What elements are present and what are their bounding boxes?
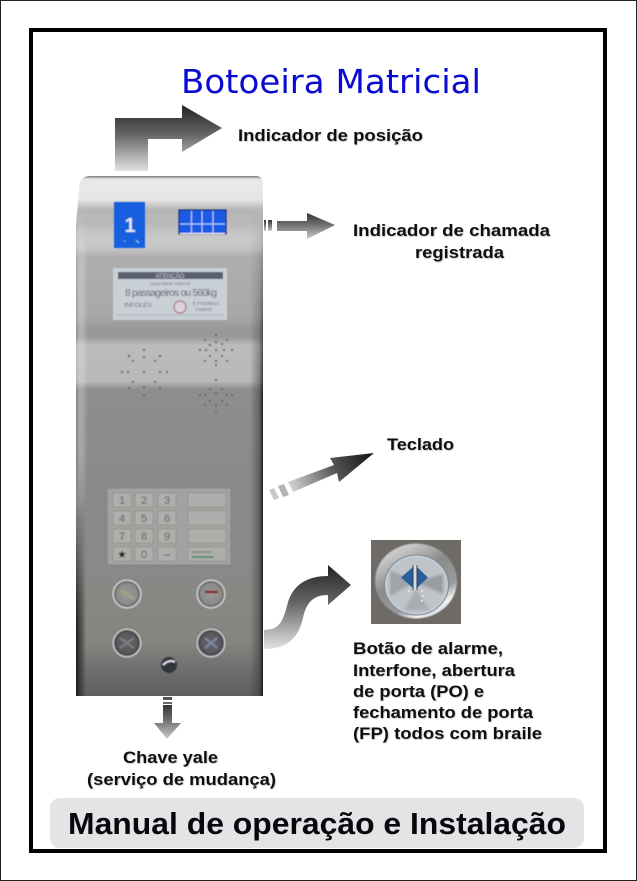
keypad: 4 [119, 513, 125, 525]
position display: 1 [124, 215, 136, 237]
footer bar: Manual de operação e Instalação [68, 806, 566, 841]
panel: stainless steel button panel [76, 176, 263, 696]
keypad: 7 [119, 531, 125, 543]
capacity placard [113, 268, 227, 320]
speaker holes [121, 334, 233, 412]
keypad: 0 [141, 549, 147, 561]
registered call display [179, 210, 226, 234]
keypad: 8 [141, 531, 147, 543]
button: bottom left [112, 628, 142, 658]
keypad: 6 [164, 513, 170, 525]
arrow: buttons [264, 565, 351, 649]
label: buttons description: de porta (PO) e [353, 683, 484, 701]
label: registered call indicator [353, 222, 551, 262]
label: buttons description: Interfone, abertura [353, 662, 516, 680]
label: buttons description: Botão de alarme, [353, 640, 503, 658]
label: buttons description [353, 640, 542, 743]
label: registered call indicator: Indicador de chamada [353, 222, 551, 240]
arrow: keypad [269, 453, 374, 500]
arrow: key switch [154, 697, 181, 739]
label: key switch: (serviço de mudança) [87, 771, 276, 789]
capacity placard: FUMAR [196, 307, 213, 312]
footer bar [50, 798, 584, 848]
label: registered call indicator: registrada [415, 244, 505, 262]
button: top left [112, 578, 142, 610]
keypad: 2 [141, 495, 147, 507]
capacity placard: É PROIBIDO [193, 300, 220, 306]
arrow: registered call [264, 213, 335, 239]
label: key switch [87, 749, 276, 789]
label: buttons description: fechamento de porta [353, 704, 534, 722]
arrow: position indicator [115, 105, 222, 171]
keypad: 1 [119, 495, 125, 507]
position display [114, 202, 145, 248]
photo: door button with braille [371, 540, 461, 624]
capacity placard: 8 passageiros ou 560kg [125, 288, 217, 299]
keypad: – [164, 549, 171, 561]
capacity placard: capacidade máxima [150, 281, 191, 286]
keypad [107, 488, 231, 565]
keypad: ★ [117, 549, 127, 561]
keypad: 9 [164, 531, 170, 543]
label: key switch: Chave yale [123, 749, 218, 767]
title: Botoeira Matricial [181, 62, 481, 101]
capacity placard: INFOLEV [124, 302, 153, 309]
button: top right [196, 578, 226, 610]
button: bottom right [196, 628, 226, 658]
label: position indicator: Indicador de posição [238, 127, 423, 145]
keypad: 5 [141, 513, 147, 525]
label: keypad: Teclado [387, 436, 454, 454]
label: buttons description: (FP) todos com braile [353, 725, 542, 743]
round buttons [112, 578, 226, 673]
key switch [161, 657, 177, 673]
keypad: 3 [164, 495, 170, 507]
capacity placard: ATENÇÃO [156, 273, 185, 280]
